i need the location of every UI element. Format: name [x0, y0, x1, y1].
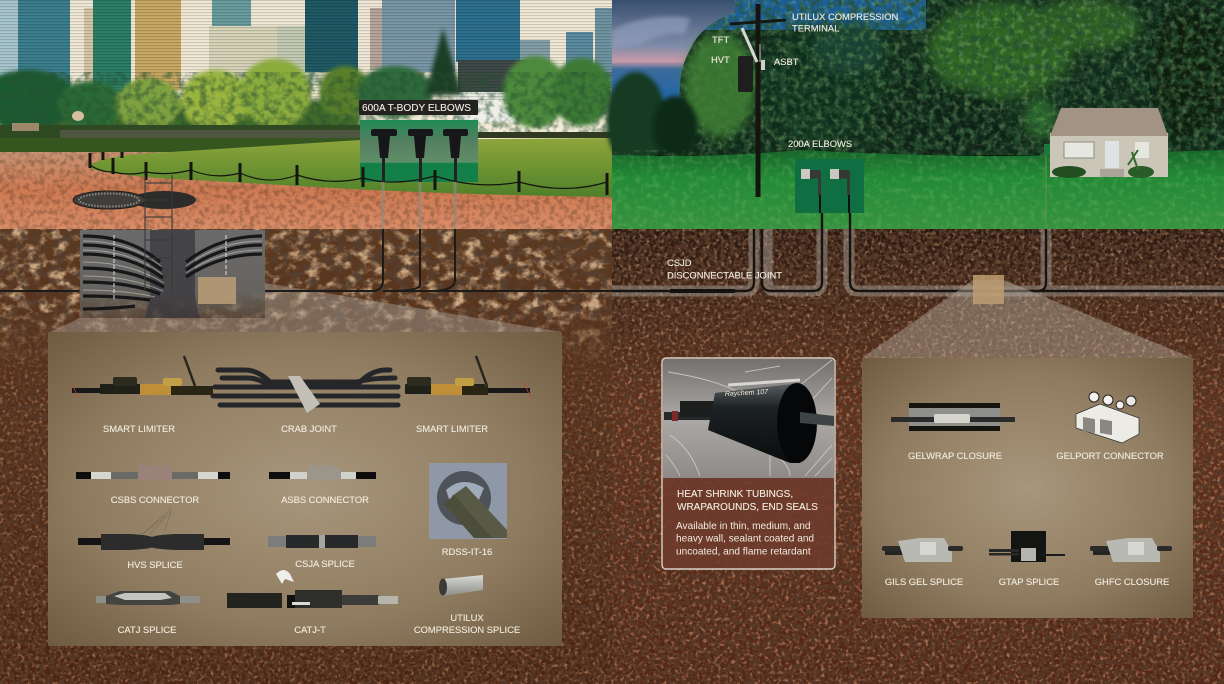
crab joint — [213, 370, 398, 413]
label: TFT: TFT — [712, 34, 729, 45]
tree beside the pole — [684, 33, 756, 137]
label: HVT: HVT — [711, 54, 730, 65]
lawn — [88, 138, 612, 197]
body text: heat shrink: uncoated, and flame retardant — [676, 546, 811, 557]
label: RDSS-IT-16: RDSS-IT-16 — [442, 546, 492, 557]
Utilux compression splice — [439, 575, 483, 596]
house — [1044, 108, 1168, 229]
label: Utilux compression terminal: TERMINAL — [792, 22, 839, 34]
green box: 200A elbows — [795, 159, 864, 213]
zoom cone: right panel — [862, 280, 1192, 358]
label: CSBS connector: CSBS CONNECTOR — [111, 494, 199, 505]
heat shrink product photo: Raychem 107 — [725, 389, 769, 398]
grass — [612, 150, 1224, 229]
sky — [612, 0, 735, 102]
label: CATJ splice: CATJ SPLICE — [118, 624, 176, 635]
label: Utilux compression splice: COMPRESSION SPLICE — [414, 624, 520, 635]
park trees — [0, 28, 612, 130]
label: GHFC closure: GHFC CLOSURE — [1095, 576, 1169, 587]
buried cables: 600A side — [0, 182, 612, 291]
zoom marker: left splice — [198, 277, 236, 304]
panel: left splice products — [48, 332, 562, 646]
manhole hole — [132, 191, 196, 209]
GTAP splice — [989, 531, 1065, 562]
HVS splice — [78, 508, 230, 550]
heading: heat shrink: WRAPAROUNDS, END SEALS — [677, 502, 818, 513]
elbow icons — [371, 129, 468, 182]
label: GILS gel splice: GILS GEL SPLICE — [885, 576, 963, 587]
panel: heat shrink card — [662, 358, 835, 569]
smart limiter right — [405, 356, 531, 398]
label: CATJ-T: CATJ-T — [294, 624, 326, 635]
clouds — [612, 16, 690, 48]
label: Utilux compression splice: UTILUX — [450, 612, 484, 623]
underground vault with cable racks — [80, 230, 265, 318]
label: CSJA splice: CSJA SPLICE — [295, 558, 355, 569]
CATJ splice — [96, 591, 200, 605]
label: CSJD disconnectable joint: DISCONNECTABLE JOINT — [667, 270, 782, 280]
right scene: rural lot above ground — [606, 0, 1224, 229]
Gelport connector — [1076, 392, 1139, 443]
Gelwrap closure — [891, 403, 1015, 431]
left soil — [0, 229, 612, 684]
pole labels — [711, 11, 898, 67]
smart limiter left — [72, 356, 213, 397]
RDSS-IT-16 duct seal photo — [429, 463, 507, 539]
GHFC closure — [1090, 538, 1172, 562]
label: ASBS connector: ASBS CONNECTOR — [281, 494, 369, 505]
heading: heat shrink: HEAT SHRINK TUBINGS, — [677, 489, 793, 500]
CSBS connector — [76, 464, 230, 480]
200A elbows — [788, 138, 852, 213]
heat shrink product photo — [663, 359, 834, 478]
ladder — [145, 175, 172, 290]
signboard — [12, 123, 39, 131]
elbow icons — [801, 169, 850, 213]
CSJA splice — [268, 535, 376, 548]
GILS gel splice — [882, 538, 963, 562]
body text: heat shrink: heavy wall, sealant coated and — [676, 534, 814, 545]
left scene: city park above ground — [0, 0, 612, 229]
right soil — [612, 229, 1224, 684]
label: 200A elbows: 200A ELBOWS — [788, 138, 852, 149]
label: smart limiter: SMART LIMITER — [103, 423, 175, 434]
lawn fence — [90, 152, 607, 195]
label: smart limiter: SMART LIMITER — [416, 423, 488, 434]
ASBS connector — [269, 464, 376, 480]
label: GTAP splice: GTAP SPLICE — [999, 576, 1059, 587]
label: Utilux compression terminal: UTILUX COMPRESSION — [792, 11, 898, 22]
label: Gelwrap closure: GELWRAP CLOSURE — [908, 450, 1002, 461]
skyline buildings — [0, 0, 612, 122]
manhole cover — [73, 191, 145, 209]
zoom marker: right splice — [973, 275, 1004, 304]
panel: right splice products — [862, 358, 1193, 618]
label: HVS splice: HVS SPLICE — [127, 559, 183, 570]
buried cables: rural side — [612, 213, 1224, 291]
plaza path — [0, 152, 612, 229]
label: crab joint: CRAB JOINT — [281, 423, 337, 434]
utility pole — [730, 4, 786, 197]
label: 600A T-body elbows: 600A T-BODY ELBOWS — [362, 103, 471, 114]
label: Gelport connector: GELPORT CONNECTOR — [1056, 450, 1164, 461]
zoom cone: left panel — [50, 283, 562, 332]
label: ASBT: ASBT — [774, 56, 799, 67]
tree masses — [758, 0, 1224, 155]
body text: heat shrink: Available in thin, medium, and — [676, 521, 810, 532]
600A T-body elbows — [359, 100, 478, 182]
left tree clump — [606, 72, 697, 168]
label: CSJD disconnectable joint: CSJD — [667, 257, 692, 268]
CATJ-T splice — [227, 570, 398, 608]
